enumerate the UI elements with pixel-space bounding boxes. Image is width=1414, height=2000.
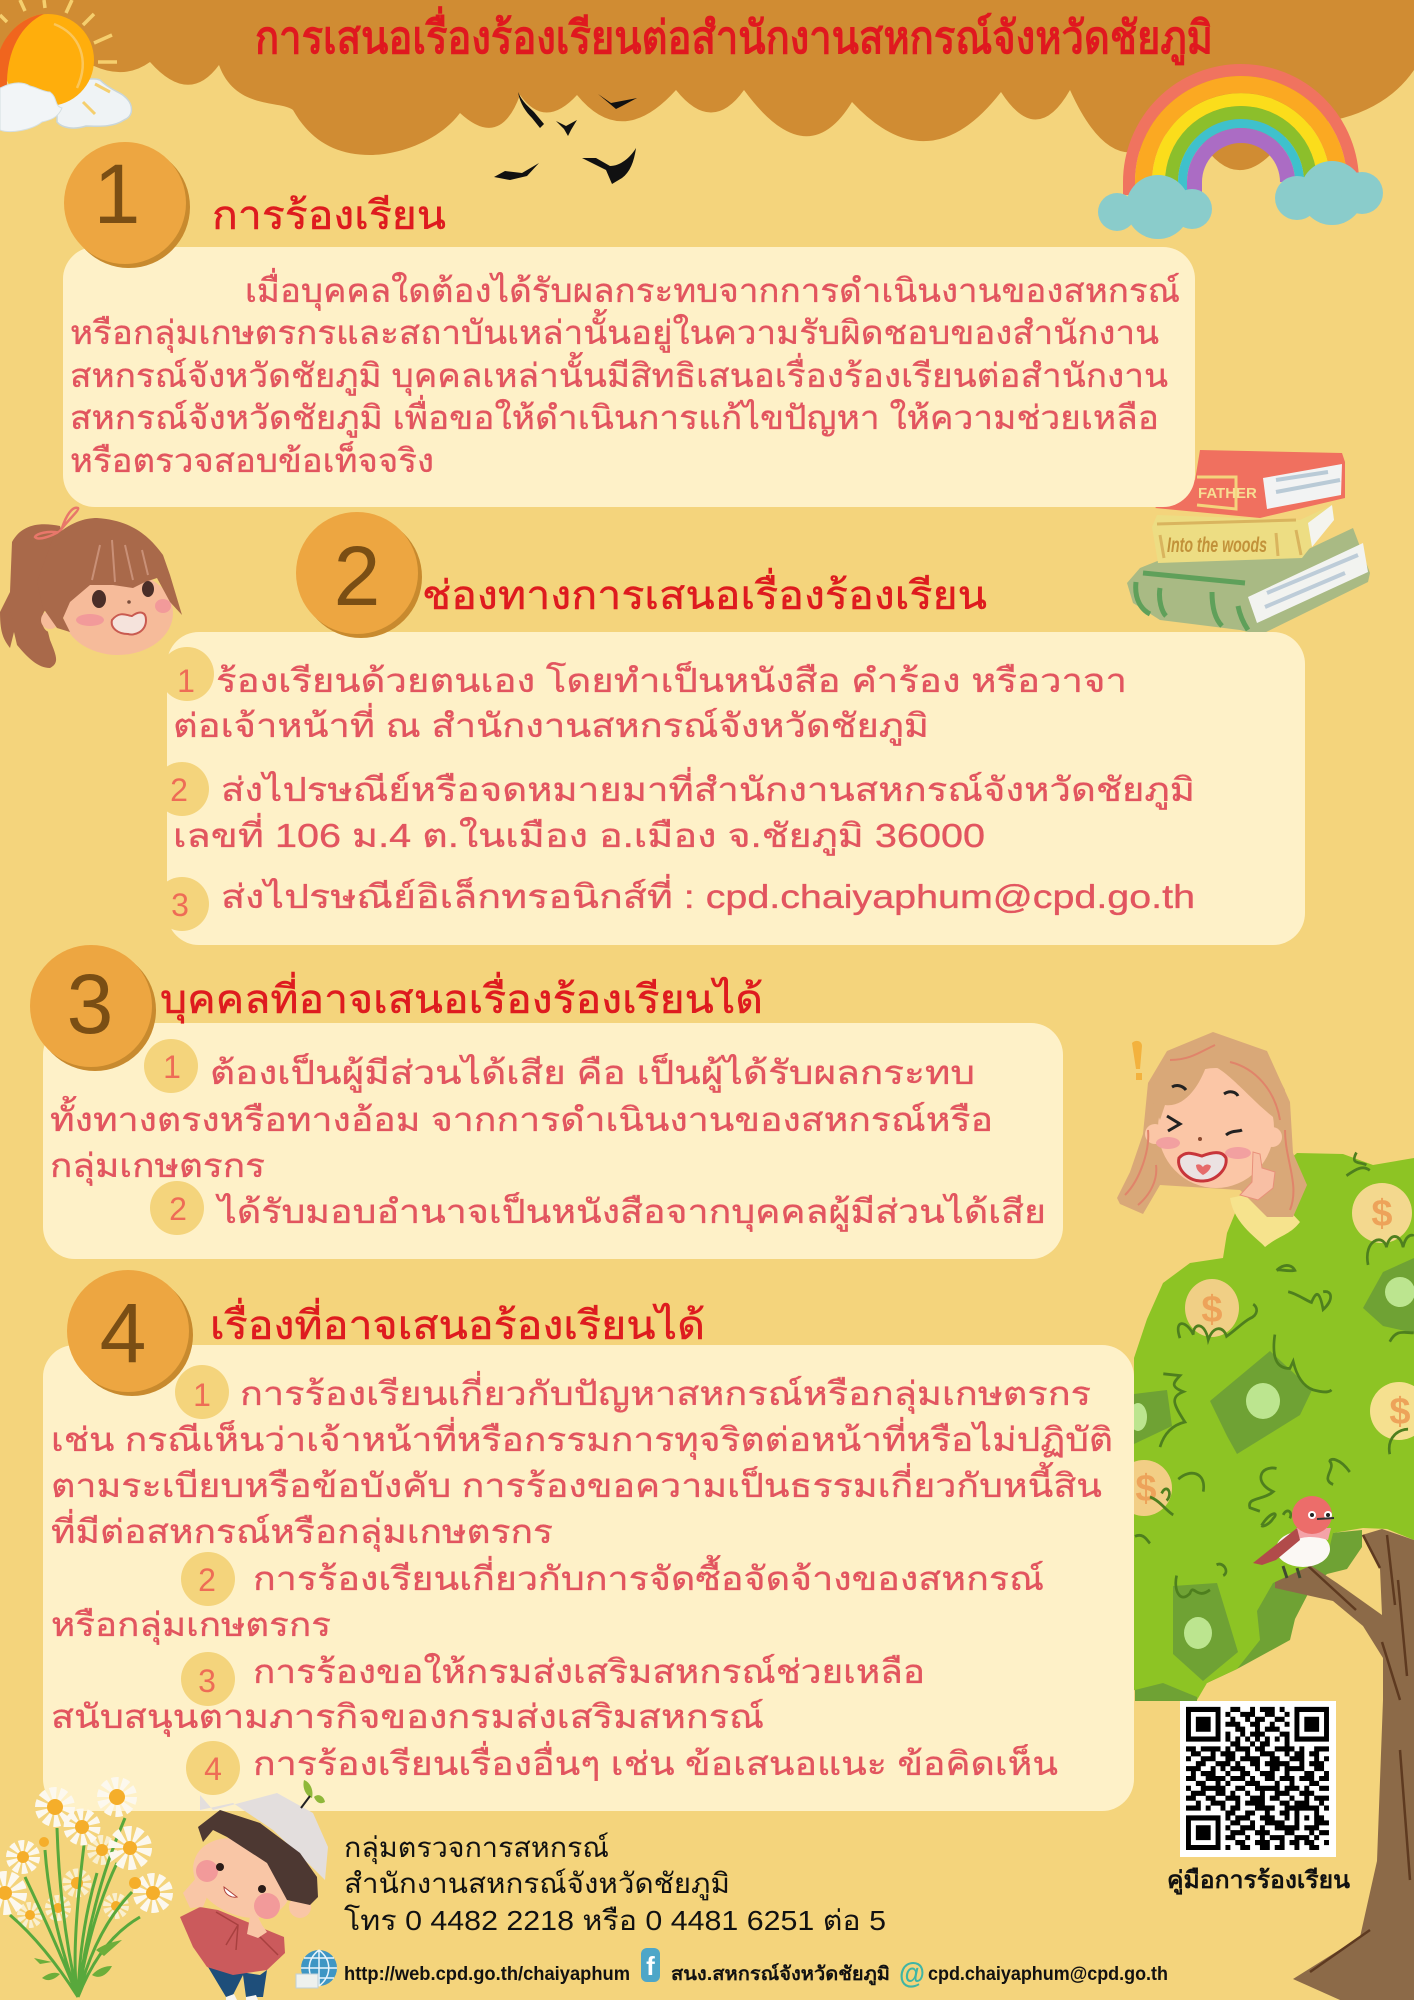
channel 1: ร้องเรียนด้วยตนเอง โดยทำเป็นหนังสือ คำร้อง หรือวาจา xyxy=(216,661,1127,699)
panel: eligible complainants: 2 xyxy=(169,1191,187,1227)
panel: complaint definition: หรือตรวจสอบข้อเท็จจริง xyxy=(70,441,434,479)
heading 3: บุคคลที่อาจเสนอเรื่องร้องเรียนได้ xyxy=(160,972,763,1024)
coins: $ xyxy=(1371,1193,1393,1235)
channel 1 xyxy=(160,647,1127,746)
panel: complaint topics xyxy=(43,1345,1134,1811)
number badge 2: 2 xyxy=(334,529,380,623)
icon: boy with cap xyxy=(180,1780,328,2000)
yellow book: Into the woods xyxy=(1167,534,1267,557)
panel: complaint topics: เช่น กรณีเห็นว่าเจ้าหน้าที่หรือกรรมการทุจริตต่อหน้าที่หรือไม่ปฏิบัติ xyxy=(51,1417,1113,1460)
panel: complaint topics: 2 xyxy=(198,1562,216,1598)
panel: complaint definition xyxy=(63,247,1195,507)
panel: eligible complainants: ได้รับมอบอำนาจเป็นหนังสือจากบุคคลผู้มีส่วนได้เสีย xyxy=(215,1192,1046,1232)
foliage xyxy=(1134,1153,1414,1701)
panel: complaint topics: หรือกลุ่มเกษตรกร xyxy=(51,1606,331,1645)
qr caption: คู่มือการร้องเรียน xyxy=(1167,1867,1351,1895)
squiggle marks xyxy=(1135,1152,1414,1597)
icon: girl with blonde hair xyxy=(1117,1032,1307,1217)
panel: complaint topics: การร้องเรียนเรื่องอื่นๆ เช่น ข้อเสนอแนะ ข้อคิดเห็น xyxy=(253,1741,1058,1782)
heading 1: การร้องเรียน xyxy=(212,194,446,238)
channel 2: ส่งไปรษณีย์หรือจดหมายมาที่สำนักงานสหกรณ์จังหวัดชัยภูมิ xyxy=(221,767,1195,810)
channel 2: เลขที่ 106 ม.4 ต.ในเมือง อ.เมือง จ.ชัยภูมิ 36000 xyxy=(173,813,985,856)
channel 2: 2 xyxy=(170,772,188,808)
shadow foliage xyxy=(1200,1530,1362,1683)
icon: rainbow with clouds xyxy=(1098,70,1383,239)
icon: at sign: @ xyxy=(899,1957,925,1990)
panel: complaint topics: การร้องขอให้กรมส่งเสริมสหกรณ์ช่วยเหลือ xyxy=(253,1653,925,1690)
panel: complaint topics: สนับสนุนตามภารกิจของกรมส่งเสริมสหกรณ์ xyxy=(51,1698,764,1737)
red book xyxy=(1155,450,1345,518)
facebook page name: สนง.สหกรณ์จังหวัดชัยภูมิ xyxy=(671,1963,890,1986)
panel: eligible complainants: กลุ่มเกษตรกร xyxy=(50,1147,265,1186)
coins: $ xyxy=(1135,1468,1157,1510)
heading 4: เรื่องที่อาจเสนอร้องเรียนได้ xyxy=(210,1298,705,1348)
stems xyxy=(10,1818,140,1997)
panel: complaint topics: การร้องเรียนเกี่ยวกับปัญหาสหกรณ์หรือกลุ่มเกษตรกร xyxy=(240,1371,1091,1414)
icon: flying birds xyxy=(494,92,637,184)
panel: complaint topics: 1 xyxy=(193,1377,211,1413)
number badge 3 xyxy=(30,945,156,1071)
number badge 4: 4 xyxy=(100,1286,146,1380)
number badge 2 xyxy=(296,512,422,638)
panel: complaint topics: ตามระเบียบหรือข้อบังคับ การร้องขอความเป็นธรรมเกี่ยวกับหนี้สิน xyxy=(51,1462,1102,1504)
trunk and branch xyxy=(1275,1529,1414,2000)
channel 3: ส่งไปรษณีย์อิเล็กทรอนิกส์ที่ : cpd.chaiyaphum@cpd.go.th xyxy=(221,874,1195,915)
title: การเสนอเรื่องร้องเรียนต่อสำนักงานสหกรณ์จังหวัดชัยภูมิ xyxy=(255,6,1213,66)
icon: globe and mail xyxy=(296,1950,337,1988)
contact text xyxy=(344,1832,886,1936)
green book xyxy=(1127,528,1370,635)
red book: FATHER xyxy=(1198,485,1257,502)
icon: facebook: f xyxy=(646,1951,655,1981)
contact text: กลุ่มตรวจการสหกรณ์ xyxy=(344,1832,609,1865)
panel: complaint definition: สหกรณ์จังหวัดชัยภูมิ เพื่อขอให้ดำเนินการแก้ไขปัญหา ให้ความช่วยเหลือ xyxy=(70,395,1159,438)
number badge 4 xyxy=(67,1270,193,1396)
panel: complaint topics: 3 xyxy=(198,1663,216,1699)
icon: money tree xyxy=(1116,1152,1414,2000)
yellow book xyxy=(1152,505,1334,563)
panel: complaint topics: 4 xyxy=(204,1751,222,1787)
panel: complaint definition: สหกรณ์จังหวัดชัยภูมิ บุคคลเหล่านั้นมีสิทธิเสนอเรื่องร้องเรียนต่อสำนักงาน xyxy=(70,352,1168,396)
bird on branch xyxy=(1253,1496,1334,1578)
heading 2: ช่องทางการเสนอเรื่องร้องเรียน xyxy=(422,568,987,618)
banknotes xyxy=(1134,1258,1414,1701)
channel 1: ต่อเจ้าหน้าที่ ณ สำนักงานสหกรณ์จังหวัดชัยภูมิ xyxy=(173,703,929,746)
panel: complaint definition: หรือกลุ่มเกษตรกรและสถาบันเหล่านั้นอยู่ในความรับผิดชอบของสำนักงาน xyxy=(70,309,1159,353)
panel: complaint channels xyxy=(155,632,1305,945)
panel: eligible complainants: 1 xyxy=(163,1049,181,1085)
channel 1: 1 xyxy=(177,663,195,699)
back flowers xyxy=(22,1841,124,1923)
website link: http://web.cpd.go.th/chaiyaphum xyxy=(344,1964,630,1985)
number badge 1 xyxy=(64,142,190,268)
panel: complaint topics: การร้องเรียนเกี่ยวกับการจัดซื้อจัดจ้างของสหกรณ์ xyxy=(253,1555,1044,1597)
contact text: สำนักงานสหกรณ์จังหวัดชัยภูมิ xyxy=(344,1868,730,1901)
channel 3 xyxy=(155,874,1195,931)
channel 2 xyxy=(155,762,1195,856)
qr code xyxy=(1180,1701,1336,1857)
contact text: โทร 0 4482 2218 หรือ 0 4481 6251 ต่อ 5 xyxy=(344,1904,886,1936)
icon: stacked books xyxy=(1127,450,1370,635)
panel: complaint topics: ที่มีต่อสหกรณ์หรือกลุ่มเกษตรกร xyxy=(51,1509,553,1552)
coins: $ xyxy=(1389,1391,1411,1433)
panel: complaint definition: เมื่อบุคคลใดต้องได้รับผลกระทบจากการดำเนินงานของสหกรณ์ xyxy=(245,268,1180,311)
coins xyxy=(1116,1183,1414,1516)
icon: facebook xyxy=(641,1948,660,1982)
front flowers xyxy=(0,1785,165,1906)
icon: girl face with ponytail xyxy=(0,508,182,668)
email link: cpd.chaiyaphum@cpd.go.th xyxy=(928,1964,1168,1985)
header scalloped brown band xyxy=(0,0,1414,170)
channel 3: 3 xyxy=(171,887,189,923)
icon: daisies xyxy=(0,1785,165,1997)
coins: $ xyxy=(1201,1289,1223,1331)
number badge 1: 1 xyxy=(94,147,140,241)
panel: eligible complainants xyxy=(43,1023,1063,1259)
icon: sun with cloud xyxy=(0,0,132,132)
panel: eligible complainants: ต้องเป็นผู้มีส่วนได้เสีย คือ เป็นผู้ได้รับผลกระทบ xyxy=(210,1053,975,1093)
panel: eligible complainants: ทั้งทางตรงหรือทางอ้อม จากการดำเนินงานของสหกรณ์หรือ xyxy=(50,1096,993,1138)
number badge 3: 3 xyxy=(67,957,113,1051)
